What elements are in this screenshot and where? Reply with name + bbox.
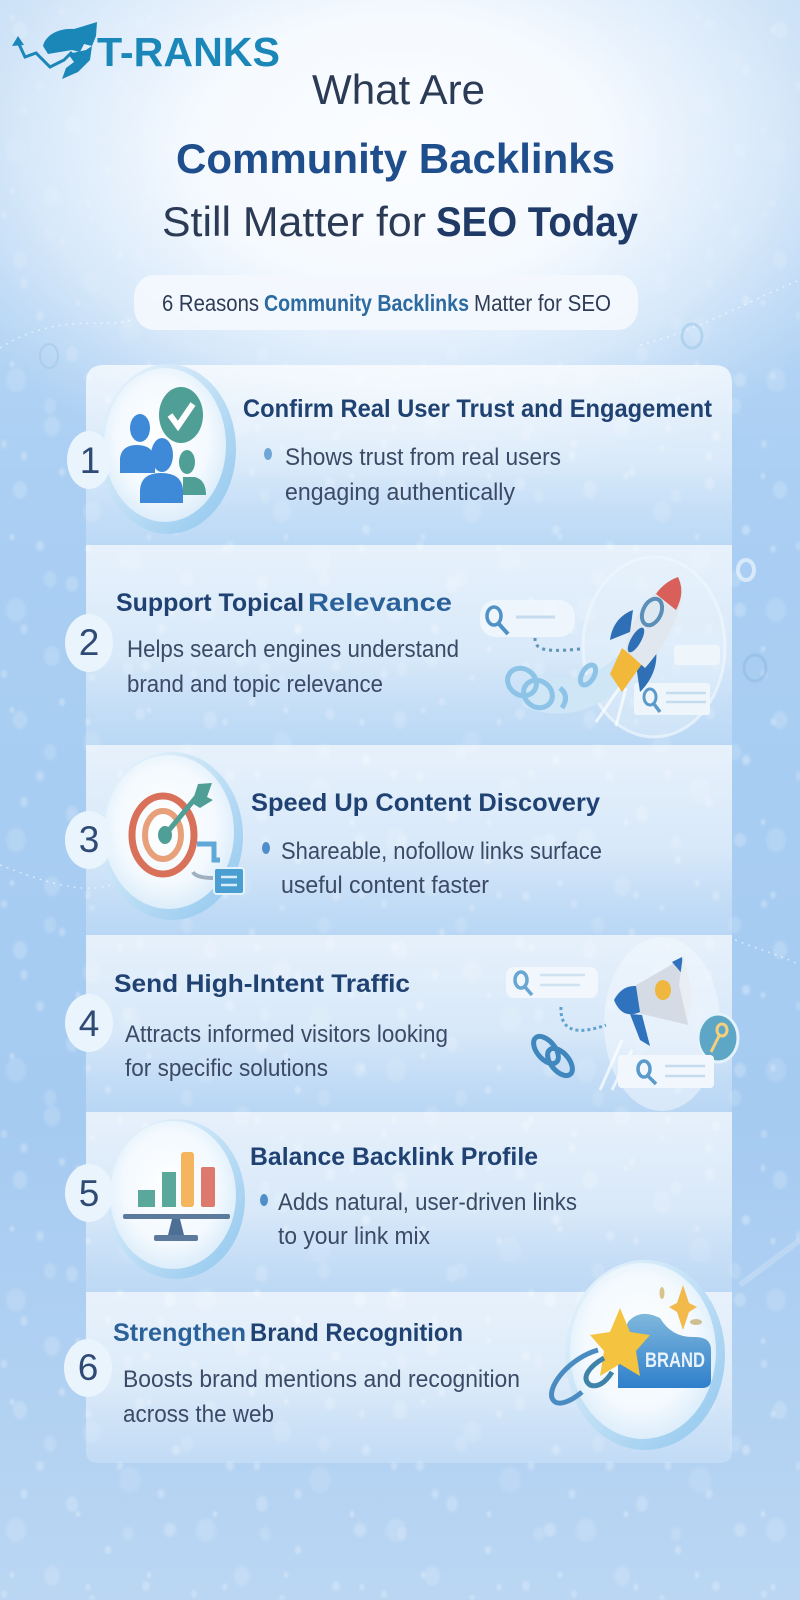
body text 3: useful content faster <box>281 872 489 899</box>
number badge 5 <box>65 1164 113 1222</box>
icon: bar chart on stand <box>107 1119 245 1279</box>
heading 5: Balance Backlink Profile <box>250 1143 538 1171</box>
number badge 6 <box>64 1339 112 1397</box>
number badge 1: 1 <box>80 440 100 481</box>
number badge 3: 3 <box>79 819 99 860</box>
subtitle pill: Community Backlinks <box>264 290 469 316</box>
title <box>162 66 639 245</box>
body text 4: for specific solutions <box>125 1055 328 1082</box>
title: Still Matter for <box>162 198 426 245</box>
panel: reason 5 <box>65 1112 732 1292</box>
heading 4: Send High-Intent Traffic <box>114 970 410 998</box>
body text 5: Adds natural, user-driven links <box>278 1189 577 1216</box>
subtitle pill: 6 Reasons <box>162 290 259 316</box>
panel: reason 6 <box>64 1260 732 1463</box>
body text 6: Boosts brand mentions and recognition <box>123 1366 520 1393</box>
heading 2: Relevance <box>308 589 452 617</box>
icon: rocket with links and search <box>480 557 725 737</box>
body text 3: Shareable, nofollow links surface <box>281 838 602 865</box>
heading 6 <box>113 1319 463 1347</box>
number badge 2 <box>65 614 113 672</box>
icon: brand with star and chain: BRAND <box>645 1349 705 1372</box>
logo: T-RANKS <box>12 22 280 79</box>
body text 3 <box>262 838 602 899</box>
panel: reason 1 <box>67 364 732 545</box>
body text 2: brand and topic relevance <box>127 671 383 698</box>
heading 6: Brand Recognition <box>250 1319 463 1347</box>
panel: reason 4 <box>65 935 738 1112</box>
panel: reason 3 <box>65 745 732 935</box>
icon: users with checkmark <box>100 364 236 534</box>
number badge 5: 5 <box>79 1173 99 1214</box>
number badge 4 <box>65 994 113 1052</box>
body text 1 <box>264 444 561 506</box>
body text 6: across the web <box>123 1401 274 1428</box>
panel: reason 2 <box>65 545 732 745</box>
body text 2: Helps search engines understand <box>127 636 459 663</box>
title: SEO Today <box>436 198 639 245</box>
logo icon: dinosaur head with rising arrow <box>12 22 97 79</box>
icon: megaphone with links and search <box>506 937 738 1111</box>
logo wordmark: T-RANKS <box>97 29 280 75</box>
heading 3: Speed Up Content Discovery <box>251 789 600 817</box>
body text 5: to your link mix <box>278 1223 430 1250</box>
body text 2 <box>127 636 459 698</box>
number badge 4: 4 <box>79 1003 99 1044</box>
subtitle pill <box>134 275 638 330</box>
number badge 2: 2 <box>79 622 99 663</box>
number badge 6: 6 <box>78 1347 98 1388</box>
title: What Are <box>312 66 485 113</box>
icon: target with arrow <box>101 752 244 920</box>
body text 6 <box>123 1366 520 1428</box>
body text 4: Attracts informed visitors looking <box>125 1021 448 1048</box>
body text 1: Shows trust from real users <box>285 444 561 471</box>
subtitle pill: Matter for SEO <box>474 290 611 316</box>
body text 1: engaging authentically <box>285 479 516 506</box>
number badge 1 <box>67 431 111 489</box>
heading 6: Strengthen <box>113 1319 246 1347</box>
heading 2: Support Topical <box>116 589 304 617</box>
icon: brand with star and chain <box>552 1260 725 1450</box>
body text 5 <box>260 1189 577 1250</box>
body text 4 <box>125 1021 448 1082</box>
number badge 3 <box>65 811 113 869</box>
title: Community Backlinks <box>176 135 615 182</box>
heading 1: Confirm Real User Trust and Engagement <box>243 395 713 423</box>
heading 2 <box>116 589 452 617</box>
